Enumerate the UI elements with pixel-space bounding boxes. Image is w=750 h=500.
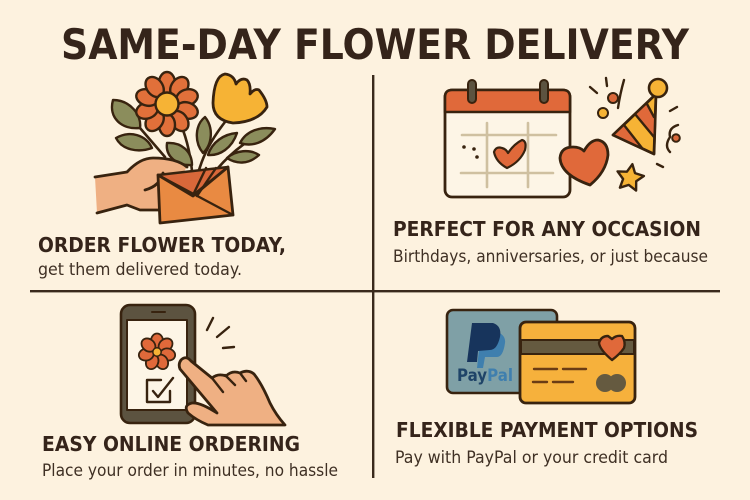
title: SAME-DAY FLOWER DELIVERY bbox=[61, 20, 690, 69]
PayPal wordmark: PayPal bbox=[457, 366, 513, 386]
tulip bbox=[213, 74, 267, 123]
phone bbox=[121, 305, 195, 423]
tap lines bbox=[207, 318, 234, 348]
card chip bbox=[596, 374, 626, 392]
phone flower bbox=[138, 334, 176, 371]
calendar grid bbox=[461, 123, 556, 187]
party hat bbox=[613, 94, 656, 154]
icon: hand holding flowers in an envelope bbox=[95, 72, 275, 223]
heading: PERFECT FOR ANY OCCASION bbox=[393, 217, 701, 241]
panel: flexible payment options bbox=[395, 310, 698, 468]
subtext: Pay with PayPal or your credit card bbox=[395, 448, 668, 468]
envelope bbox=[158, 167, 228, 195]
card heart bbox=[599, 336, 625, 360]
subtext: Birthdays, anniversaries, or just because bbox=[393, 247, 708, 267]
heading: FLEXIBLE PAYMENT OPTIONS bbox=[396, 418, 698, 442]
checkbox bbox=[147, 380, 170, 402]
stems bbox=[140, 122, 250, 192]
heading: ORDER FLOWER TODAY, bbox=[38, 233, 286, 257]
subtext: Place your order in minutes, no hassle bbox=[42, 461, 338, 481]
daisy bbox=[134, 72, 200, 136]
hand bbox=[95, 158, 187, 213]
icon: calendar and party items bbox=[445, 78, 680, 197]
calendar heart bbox=[494, 140, 526, 168]
subtext: get them delivered today. bbox=[38, 260, 242, 280]
large heart bbox=[560, 140, 608, 185]
calendar bbox=[445, 90, 570, 197]
star bbox=[618, 164, 644, 191]
panel: order flower today bbox=[38, 72, 286, 280]
PayPal mark bbox=[467, 323, 505, 368]
PayPal card bbox=[447, 310, 557, 393]
calendar dots bbox=[462, 145, 479, 159]
hand bbox=[179, 358, 285, 425]
leaves bbox=[112, 100, 275, 165]
panel: easy online ordering bbox=[42, 305, 338, 481]
credit card bbox=[520, 322, 635, 403]
card lines bbox=[533, 369, 586, 382]
heading: EASY ONLINE ORDERING bbox=[42, 432, 300, 456]
confetti bbox=[590, 78, 678, 167]
icon: phone and tapping hand bbox=[121, 305, 285, 425]
panel: perfect for any occasion bbox=[393, 78, 708, 267]
icon: PayPal card and credit card bbox=[447, 310, 635, 403]
